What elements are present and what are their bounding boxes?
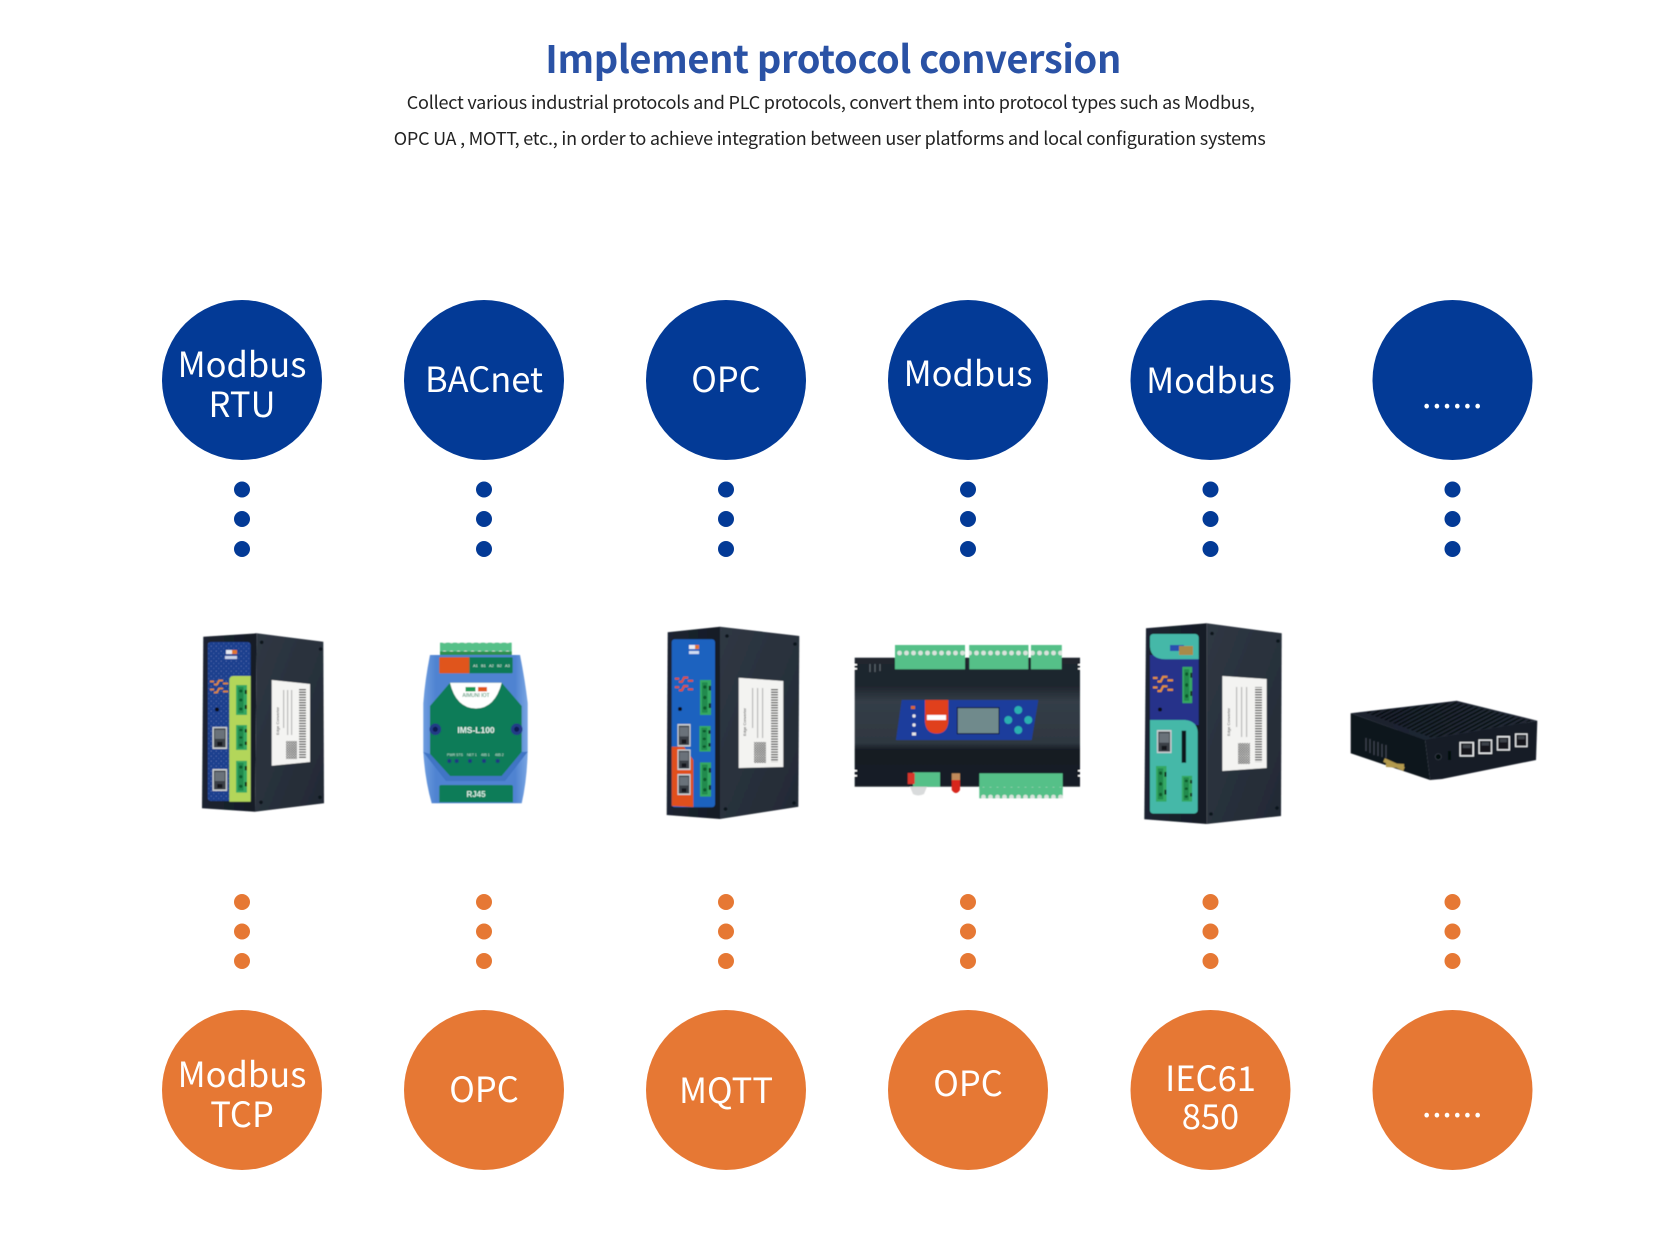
title: Implement protocol conversion — [545, 29, 1121, 84]
device 2: blue DIN module IMS-L100: NET 1 — [467, 753, 477, 757]
protocol circle: Modbus RTU: RTU — [209, 377, 275, 427]
output protocol row — [162, 1010, 1532, 1170]
subtitle: OPC UA , MOTT, etc., in order to achieve integration between user platforms and local configuration systems — [394, 125, 1266, 151]
protocol circle: Modbus TCP: Modbus — [178, 1047, 306, 1097]
protocol circle: MQTT: MQTT — [679, 1063, 773, 1113]
protocol circle: Modbus: Modbus — [904, 346, 1032, 396]
device 2: blue DIN module IMS-L100: A2 — [489, 663, 495, 668]
protocol circle: OPC: OPC — [933, 1056, 1003, 1106]
input protocol row — [162, 300, 1532, 460]
device 5: teal and navy edge gateway: Edge Converter — [1226, 707, 1231, 736]
protocol circle: IEC61850 — [1130, 1010, 1290, 1170]
protocol circle: Modbus TCP: TCP — [210, 1087, 274, 1137]
protocol circle: IEC61850: 850 — [1182, 1089, 1239, 1139]
device 2: blue DIN module IMS-L100: B1 — [481, 663, 487, 668]
protocol circle: OPC — [646, 300, 806, 460]
device 5: teal and navy edge gateway — [1144, 623, 1282, 824]
subtitle: Collect various industrial protocols and PLC protocols, convert them into protocol types such as Modbus, — [407, 89, 1255, 115]
protocol circle: Modbus — [888, 300, 1048, 460]
protocol circle: BACnet — [404, 300, 564, 460]
protocol circle: OPC: OPC — [449, 1062, 519, 1112]
device 2: blue DIN module IMS-L100: 485 1 — [481, 753, 490, 757]
device 2: blue DIN module IMS-L100: A1 — [473, 663, 479, 668]
device 4: wide DIN controller with LCD — [854, 645, 1081, 798]
device 2: blue DIN module IMS-L100: PWR STS — [447, 753, 464, 757]
device 1: blue and lime edge gateway: Edge Converter — [275, 706, 280, 735]
device 2: blue DIN module IMS-L100: IMS-L100 — [457, 725, 495, 735]
protocol circle: OPC — [888, 1010, 1048, 1170]
device 2: blue DIN module IMS-L100: A3 — [505, 663, 511, 668]
protocol circle: Modbus — [1130, 300, 1290, 460]
device 2: blue DIN module IMS-L100: AIMUNI IOT — [462, 693, 490, 699]
protocol circle: OPC — [404, 1010, 564, 1170]
device 2: blue DIN module IMS-L100: RJ45 — [466, 790, 486, 799]
protocol circle: more — [1372, 300, 1532, 460]
protocol circle: MQTT — [646, 1010, 806, 1170]
blue connector dots — [234, 482, 1460, 557]
protocol circle: more: ...... — [1422, 368, 1483, 418]
protocol circle: more: ...... — [1422, 1077, 1483, 1127]
protocol circle: OPC: OPC — [691, 352, 761, 402]
protocol circle: more — [1372, 1010, 1532, 1170]
orange connector dots — [234, 894, 1460, 969]
device 3: blue and orange edge gateway: Edge Converter — [742, 707, 747, 736]
device 2: blue DIN module IMS-L100 — [423, 643, 528, 803]
protocol circle: IEC61850: IEC61 — [1165, 1051, 1256, 1101]
protocol circle: Modbus RTU — [162, 300, 322, 460]
device 6: fanless mini PC with four LAN ports — [1351, 701, 1537, 780]
device 2: blue DIN module IMS-L100: B2 — [497, 663, 503, 668]
subtitle — [394, 89, 1266, 151]
protocol circle: BACnet: BACnet — [425, 352, 543, 402]
protocol circle: Modbus RTU: Modbus — [178, 337, 306, 387]
device 3: blue and orange edge gateway — [667, 627, 799, 819]
protocol circle: Modbus: Modbus — [1146, 353, 1275, 403]
device 1: blue and lime edge gateway — [202, 633, 324, 812]
protocol circle: Modbus TCP — [162, 1010, 322, 1170]
device 2: blue DIN module IMS-L100: 485 2 — [495, 753, 504, 757]
